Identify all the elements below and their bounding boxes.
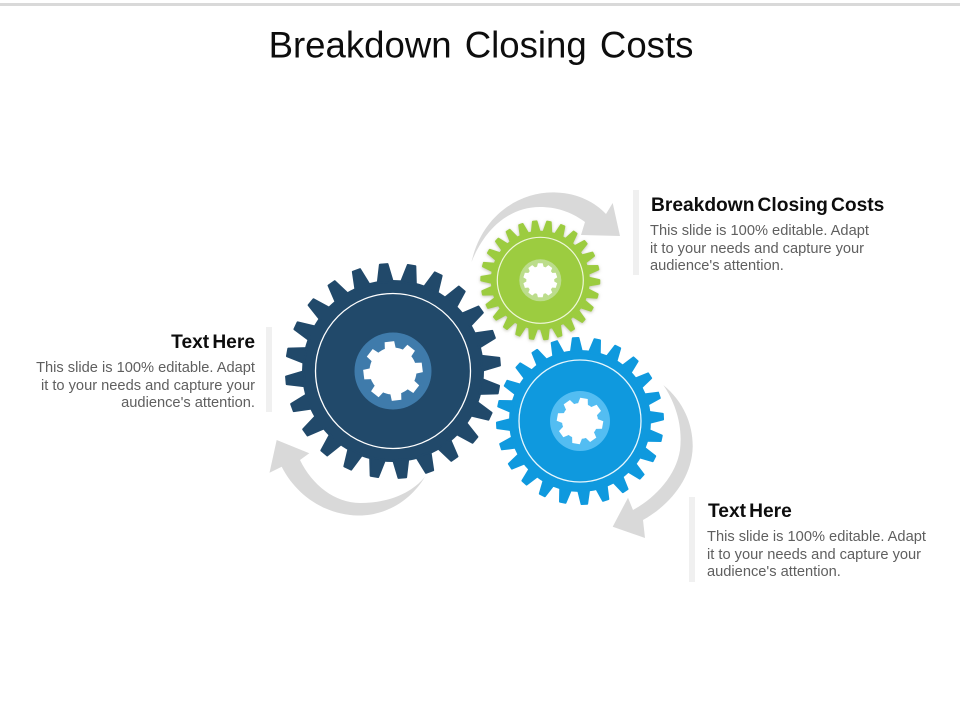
body text: audience's attention. <box>121 395 255 411</box>
body text: This slide is 100% editable. Adapt <box>36 360 255 376</box>
arrow: right down, grey <box>613 385 693 538</box>
body text: audience's attention. <box>650 258 784 274</box>
body text: audience's attention. <box>707 564 841 580</box>
body text: it to your needs and capture your <box>650 241 864 257</box>
heading: Breakdown Closing Costs <box>651 195 884 216</box>
top rule <box>0 3 960 6</box>
body text: it to your needs and capture your <box>41 378 255 394</box>
gear: large dark navy <box>286 264 500 478</box>
body text: This slide is 100% editable. Adapt <box>650 223 869 239</box>
panel: left text <box>36 327 272 412</box>
accent bar <box>689 497 695 582</box>
panel: bottom right text <box>689 497 926 582</box>
panel: top right text <box>633 190 884 275</box>
body text <box>707 529 926 580</box>
title: Breakdown Closing Costs <box>269 24 693 66</box>
arrow: bottom left, grey <box>270 440 425 516</box>
body text <box>650 223 869 274</box>
arrow: top right, grey <box>472 192 620 262</box>
body text: This slide is 100% editable. Adapt <box>707 529 926 545</box>
heading: Text Here <box>708 501 792 522</box>
heading: Text Here <box>171 332 255 353</box>
body text: it to your needs and capture your <box>707 547 921 563</box>
accent bar <box>633 190 639 275</box>
accent bar <box>266 327 272 412</box>
gear: small green <box>481 221 599 339</box>
body text <box>36 360 255 411</box>
gear: medium blue <box>497 338 663 504</box>
